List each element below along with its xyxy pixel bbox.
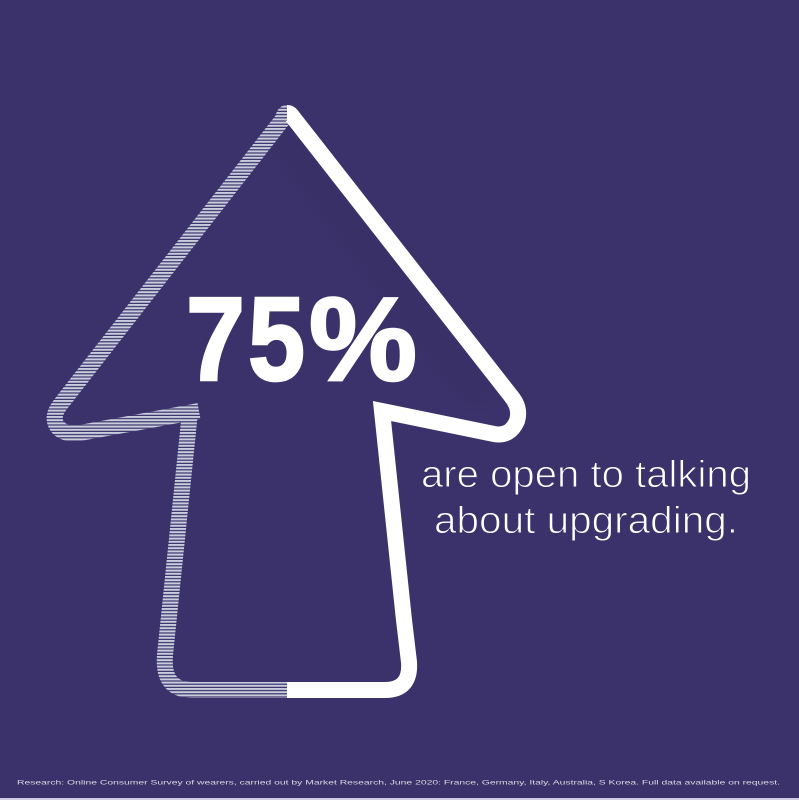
- arrow left half: hatched stroke: [55, 113, 287, 690]
- arrow outline: [55, 113, 518, 690]
- digit 7: 7: [186, 273, 245, 406]
- headline figure: 75%: [186, 273, 417, 406]
- source footnote: Research: Online Consumer Survey of wearers, carried out by Market Research, June 2020: France, Germany, Italy, Australia, S Korea. Full data available on request.: [17, 780, 780, 786]
- caption: are open to talking about upgrading: [421, 454, 751, 542]
- arrow right half: solid white stroke: [287, 113, 518, 690]
- digit 5: 5: [248, 273, 305, 406]
- caption line 2: about upgrading.: [434, 500, 738, 542]
- percent sign: %: [309, 273, 417, 406]
- caption line 1: are open to talking: [421, 454, 751, 496]
